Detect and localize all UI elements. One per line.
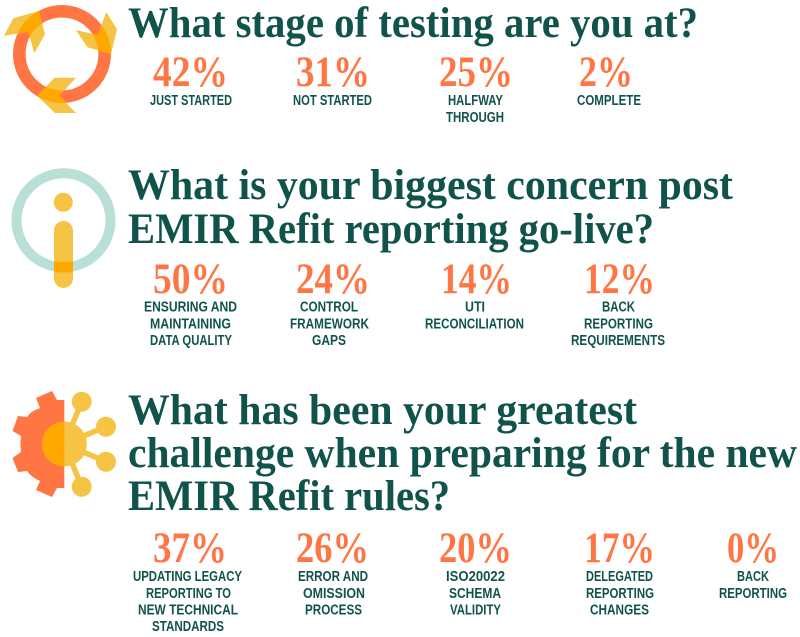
heading: testing stage: What stage of testing are you at?	[128, 0, 698, 47]
stat: 31% not started: 31%	[296, 49, 370, 96]
stat: 37% legacy reporting: STANDARDS	[152, 619, 224, 635]
stat: 0% back reporting: 0%	[727, 525, 779, 572]
stat: 50% data quality	[144, 256, 237, 349]
heading: greatest challenge: EMIR Refit rules?	[128, 473, 450, 520]
stat: 37% legacy reporting	[133, 525, 242, 635]
stat: 50% data quality: 50%	[153, 256, 228, 303]
stat: 37% legacy reporting: UPDATING LEGACY	[133, 569, 242, 585]
icon: information	[16, 173, 110, 288]
stat: 50% data quality: DATA QUALITY	[150, 333, 232, 349]
stat: 50% data quality: MAINTAINING	[150, 316, 231, 332]
stat: 17% delegated reporting: 17%	[584, 525, 655, 572]
stat: 42% just started: JUST STARTED	[150, 93, 232, 109]
stat: 31% not started	[293, 49, 372, 109]
stat: 12% back reporting requirements: REPORTING	[584, 316, 653, 332]
stat: 12% back reporting requirements: REQUIREMENTS	[571, 333, 665, 349]
heading: biggest concern: EMIR Refit reporting go-live?	[128, 206, 654, 253]
icon: circular arrows	[4, 11, 117, 113]
stat: 12% back reporting requirements: 12%	[584, 256, 655, 303]
stat: 26% error and omission: 26%	[296, 525, 369, 572]
stat: 24% control framework gaps	[290, 256, 370, 349]
heading: biggest concern	[128, 162, 734, 253]
stat: 42% just started: 42%	[153, 49, 228, 96]
stat: 17% delegated reporting: REPORTING	[586, 586, 654, 602]
stat: 20% ISO20022 schema validity: 20%	[439, 525, 512, 572]
stat: 37% legacy reporting: REPORTING TO	[146, 586, 231, 602]
stat: 25% halfway through: THROUGH	[446, 110, 504, 126]
stat: 26% error and omission	[296, 525, 369, 618]
stat: 37% legacy reporting: NEW TECHNICAL	[138, 602, 238, 618]
stat: 2% complete: COMPLETE	[577, 93, 641, 109]
heading: greatest challenge	[128, 387, 797, 520]
stat: 24% control framework gaps: CONTROL	[300, 300, 358, 316]
stat: 25% halfway through	[439, 49, 513, 126]
stat: 20% ISO20022 schema validity: ISO20022	[446, 569, 505, 585]
section: testing stage	[4, 0, 698, 126]
stat: 17% delegated reporting: DELEGATED	[586, 569, 653, 585]
stat: 14% UTI reconciliation	[425, 256, 524, 332]
stat: 2% complete: 2%	[579, 49, 633, 96]
stat: 0% back reporting: BACK	[737, 569, 769, 585]
stat: 37% legacy reporting: 37%	[153, 525, 227, 572]
heading: greatest challenge: challenge when preparing for the new	[128, 430, 797, 477]
stat: 24% control framework gaps: 24%	[296, 256, 370, 303]
stat: 50% data quality: ENSURING AND	[144, 300, 237, 316]
stat: 12% back reporting requirements: BACK	[602, 300, 635, 316]
stat: 25% halfway through: HALFWAY	[448, 93, 503, 109]
stat: 20% ISO20022 schema validity	[439, 525, 512, 618]
stat: 14% UTI reconciliation: RECONCILIATION	[425, 316, 524, 332]
stat: 24% control framework gaps: GAPS	[312, 333, 346, 349]
stat: 0% back reporting	[719, 525, 787, 602]
heading: biggest concern: What is your biggest concern post	[128, 162, 734, 209]
stat: 25% halfway through: 25%	[439, 49, 513, 96]
icon: half gear with network nodes	[12, 391, 116, 497]
section: biggest concern	[16, 162, 734, 349]
stat: 24% control framework gaps: FRAMEWORK	[290, 316, 369, 332]
stat: 12% back reporting requirements	[571, 256, 665, 349]
heading: greatest challenge: What has been your greatest	[128, 387, 638, 434]
stat: 26% error and omission: ERROR AND	[298, 569, 368, 585]
stat: 17% delegated reporting	[584, 525, 655, 618]
stat: 26% error and omission: OMISSION	[303, 586, 365, 602]
stat: 20% ISO20022 schema validity: VALIDITY	[450, 602, 501, 618]
section: greatest challenge	[12, 387, 797, 635]
stat: 31% not started: NOT STARTED	[293, 93, 372, 109]
stat: 14% UTI reconciliation: 14%	[441, 256, 512, 303]
stat: 20% ISO20022 schema validity: SCHEMA	[449, 586, 501, 602]
stat: 26% error and omission: PROCESS	[305, 602, 362, 618]
stat: 17% delegated reporting: CHANGES	[590, 602, 649, 618]
stat: 14% UTI reconciliation: UTI	[465, 300, 485, 316]
